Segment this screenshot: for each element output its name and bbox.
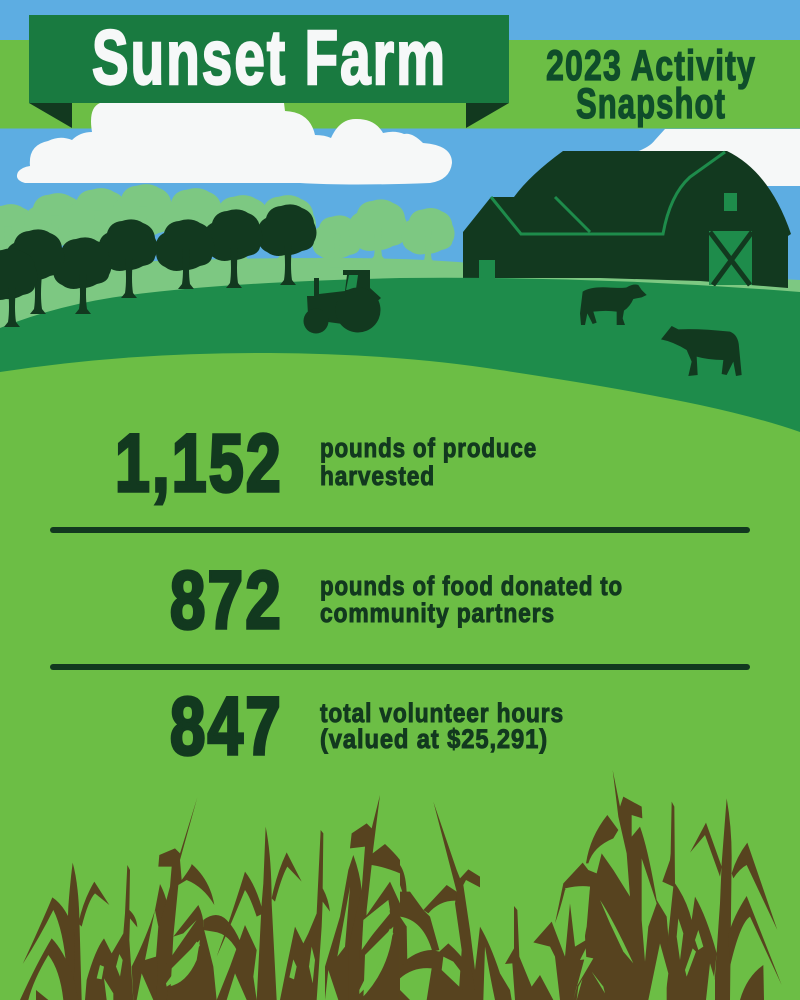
stat: volunteer hours: total volunteer hours (320, 698, 564, 728)
cow: lower (661, 326, 742, 376)
corn gaps (97, 887, 393, 1000)
cloud: large left (17, 103, 452, 184)
subtitle (546, 42, 756, 128)
stat: volunteer hours (170, 681, 564, 772)
stat: food donated: 872 (170, 555, 283, 646)
corn field: left (20, 795, 400, 1000)
stat: food donated: pounds of food donated to (320, 571, 623, 601)
sky background (0, 0, 800, 440)
barn (463, 151, 791, 288)
dark green middle hill (0, 278, 800, 440)
distant light trees (0, 184, 455, 269)
dark orchard trees (0, 204, 317, 327)
light green distant hill (0, 258, 800, 340)
title: Sunset Farm (92, 15, 447, 101)
stat: volunteer hours: 847 (170, 681, 283, 772)
subtitle: Snapshot (576, 80, 726, 128)
stat: food donated (170, 555, 623, 646)
light green header band (0, 40, 800, 128)
corn gaps (565, 858, 715, 1000)
stat: pounds harvested: pounds of produce (320, 433, 537, 463)
cloud: right (636, 129, 800, 186)
title banner (29, 15, 509, 128)
tractor (304, 270, 381, 334)
stat: volunteer hours: (valued at $25,291) (320, 724, 548, 754)
stat: pounds harvested: 1,152 (115, 418, 283, 509)
stat: pounds harvested: harvested (320, 461, 435, 491)
cow: upper (580, 285, 647, 325)
stat: food donated: community partners (320, 598, 555, 628)
stat: pounds harvested (115, 418, 537, 509)
corn field: right (400, 770, 782, 1000)
foreground light green hill (0, 353, 800, 1000)
